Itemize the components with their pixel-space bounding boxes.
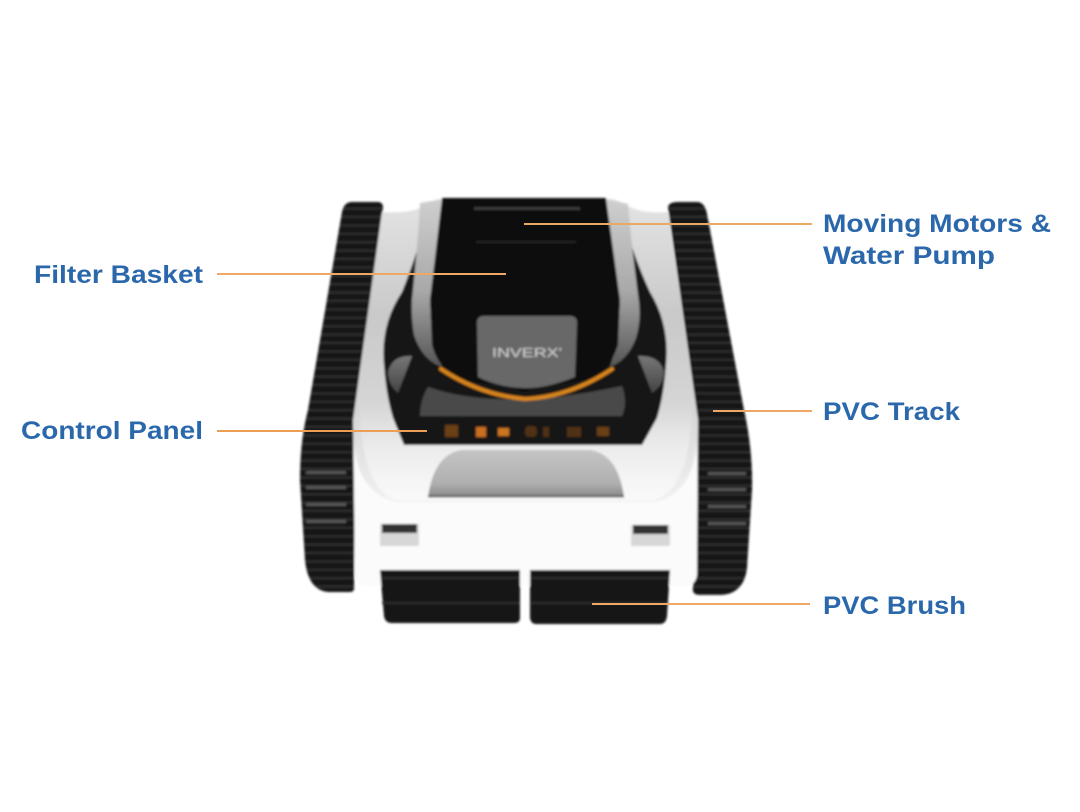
filter basket lid bbox=[430, 198, 620, 392]
left PVC brush bbox=[380, 570, 520, 623]
right side window bbox=[638, 356, 664, 393]
front white face bbox=[354, 440, 697, 586]
orange light arc bbox=[441, 369, 612, 399]
logo plate bbox=[477, 316, 577, 388]
leader line: moving motors bbox=[524, 223, 812, 225]
label: Control Panel: Control Panel bbox=[21, 417, 203, 445]
label: PVC Brush: PVC Brush bbox=[823, 592, 966, 620]
leader line: PVC brush bbox=[592, 603, 810, 605]
U-shaped upper panel bbox=[360, 400, 692, 500]
lid ridge lower bbox=[476, 241, 576, 243]
left side window bbox=[388, 356, 412, 393]
label: PVC Track: PVC Track bbox=[823, 398, 960, 426]
lid ridge top bbox=[474, 207, 580, 210]
track highlight bands bbox=[306, 471, 746, 525]
label: Filter Basket: Filter Basket bbox=[34, 261, 204, 289]
right PVC track bbox=[668, 202, 752, 595]
robot cleaner illustration bbox=[300, 198, 752, 624]
label: Moving Motors & Water Pump: Water Pump bbox=[823, 242, 995, 270]
brush ridges bbox=[381, 577, 669, 604]
hood silhouette bbox=[383, 228, 667, 445]
handle bottom line bbox=[428, 495, 624, 498]
left hood highlight bbox=[412, 199, 443, 367]
front handle recess bbox=[428, 450, 624, 497]
right clip bbox=[631, 525, 670, 546]
leader line: PVC track bbox=[713, 410, 812, 412]
right hood highlight bbox=[606, 199, 640, 367]
left PVC track bbox=[300, 202, 383, 592]
logo text: INVERX' bbox=[492, 345, 562, 360]
leader line: control panel bbox=[217, 430, 427, 432]
label: Moving Motors & Water Pump bbox=[823, 210, 1051, 270]
left clip bbox=[380, 524, 419, 546]
control panel icons bbox=[445, 425, 609, 437]
lower hood glass bbox=[420, 386, 625, 416]
body shell bbox=[353, 199, 698, 586]
right PVC brush bbox=[530, 570, 670, 624]
leader line: filter basket bbox=[217, 273, 506, 275]
label: Moving Motors & Water Pump: Moving Motors & bbox=[823, 210, 1051, 238]
